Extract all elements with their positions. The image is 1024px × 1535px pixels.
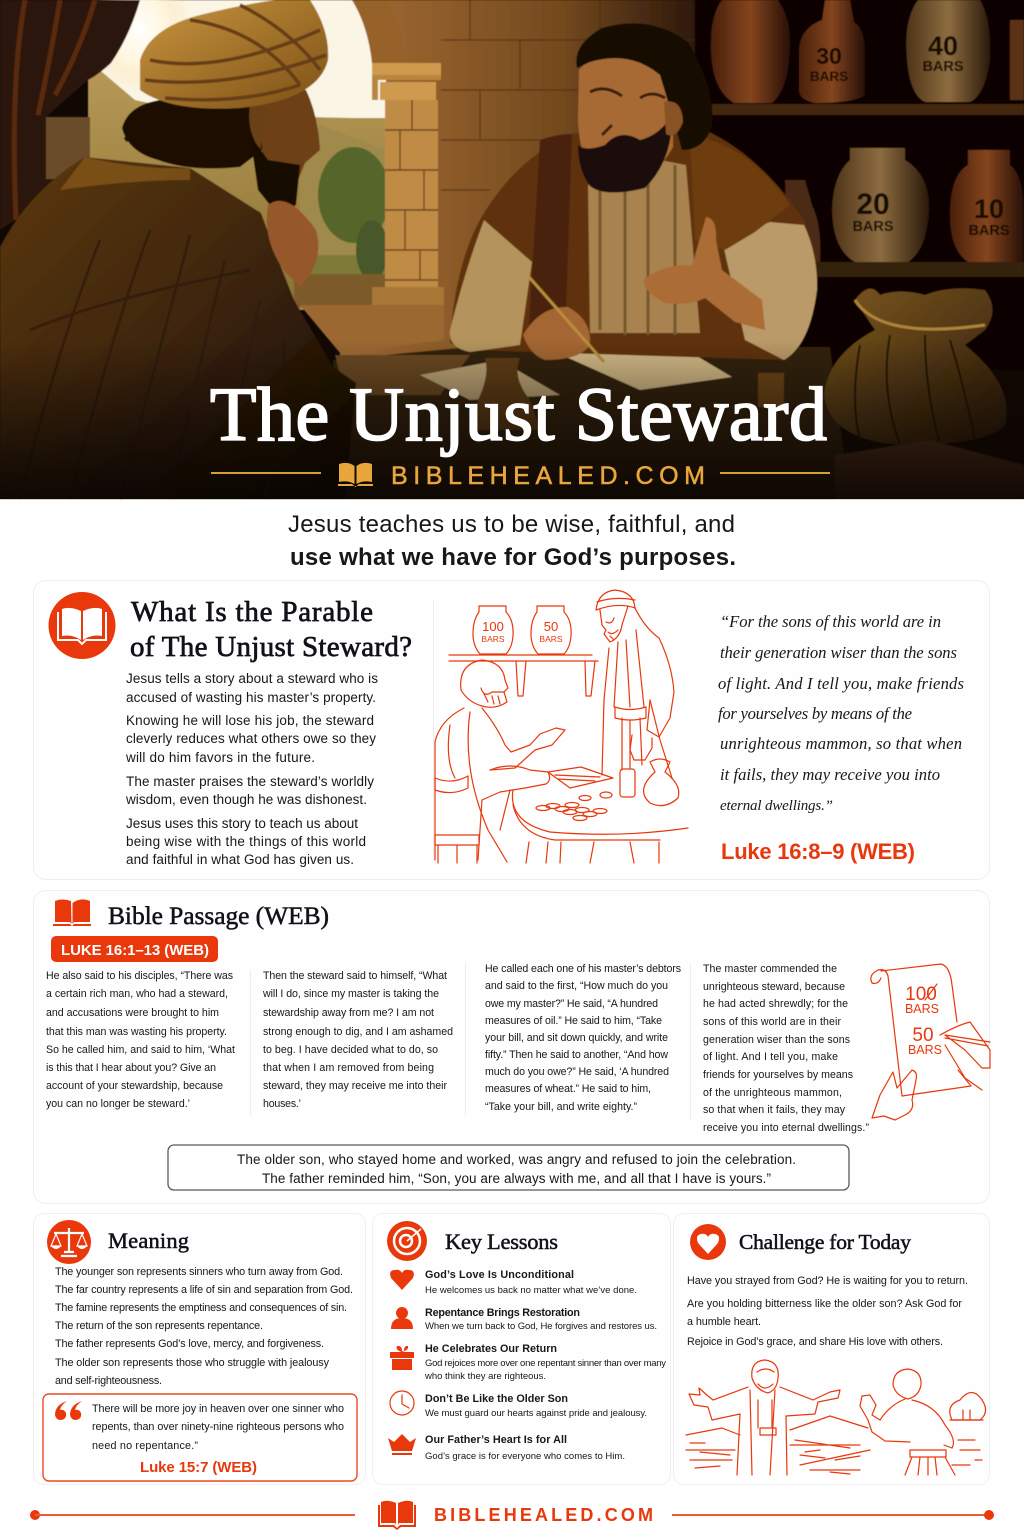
illustration: steward and master <box>435 590 688 863</box>
lesson 5: God’s grace is for everyone who comes to Him. <box>425 1451 625 1462</box>
icon: gift <box>390 1346 414 1370</box>
illustration: bill being rewritten: BARS <box>905 1002 939 1016</box>
meaning lines: and self-righteousness. <box>55 1375 162 1387</box>
passage column 4: generation wiser than the sons <box>703 1034 850 1046</box>
challenge text: Are you holding bitterness like the older son? Ask God for <box>687 1298 962 1310</box>
passage column 3: fifty.” Then he said to another, “And how <box>485 1049 668 1061</box>
lesson 2: When we turn back to God, He forgives and restores us. <box>425 1321 657 1332</box>
icon: person <box>391 1307 413 1329</box>
summary text: cleverly reduces what others owe so they <box>126 731 376 746</box>
passage column 2: strong enough to dig, and I am ashamed <box>263 1026 453 1038</box>
title: The Unjust Steward <box>210 373 827 457</box>
panel: what is the parable <box>34 580 990 880</box>
hero brand line <box>211 462 830 490</box>
scene: jar labels: BARS <box>922 59 964 75</box>
passage column 3: your bill, and sit down quickly, and write <box>485 1032 668 1044</box>
panel: bible passage <box>34 890 990 1204</box>
passage column 1: is this that I hear about you? Give an <box>46 1062 216 1074</box>
summary text: will do him favors in the future. <box>125 750 315 765</box>
scripture quote: unrighteous mammon, so that when <box>720 734 962 753</box>
meaning lines: The far country represents a life of sin and separation from God. <box>55 1284 353 1296</box>
scripture quote: “For the sons of this world are in <box>720 612 941 631</box>
scene: jar labels: BARS <box>810 69 848 84</box>
standing man <box>596 590 674 778</box>
lesson 2: Repentance Brings Restoration <box>425 1307 580 1319</box>
challenge text: Have you strayed from God? He is waiting for you to return. <box>687 1275 968 1287</box>
icon: target <box>387 1221 427 1261</box>
icon: heart in circle <box>690 1224 726 1260</box>
passage column 3 <box>485 963 681 1113</box>
illustration: father and returning son <box>686 1360 986 1475</box>
passage column 3: and said to the first, “How much do you <box>485 980 668 992</box>
summary text: and faithful in what God has given us. <box>126 852 354 867</box>
illustration: bill being rewritten: 50 <box>912 1025 934 1046</box>
passage column 4 <box>703 963 869 1134</box>
scene: stone wall <box>340 0 705 360</box>
scripture quote: it fails, they may receive you into <box>720 765 940 784</box>
scene: curtain <box>0 0 140 230</box>
meaning lines: The father represents God’s love, mercy, and forgiveness. <box>55 1338 324 1350</box>
passage column 1: you can no longer be steward.’ <box>46 1098 190 1110</box>
summary text: Jesus tells a story about a steward who is <box>126 671 378 686</box>
subtitle: use what we have for God’s purposes. <box>290 544 736 571</box>
passage column 3: “Take your bill, and write eighty.” <box>485 1101 637 1113</box>
footer brand: BIBLEHEALED.COM <box>434 1505 653 1525</box>
jars on shelf: BARS <box>539 634 563 644</box>
summary text: being wise with the things of this world <box>126 834 366 849</box>
heading: Bible Passage (WEB) <box>108 901 329 930</box>
passage column 3: measures of wheat.” He said to him, <box>485 1083 651 1095</box>
lesson 1 <box>390 1269 637 1296</box>
summary text: accused of wasting his master’s property. <box>126 690 376 705</box>
passage column 1: account of your stewardship, because <box>46 1080 223 1092</box>
lesson 3: God rejoices more over one repentant sinner than over many <box>425 1358 666 1369</box>
illustration: bill being rewritten: BARS <box>908 1043 942 1057</box>
icon: open book in circle <box>48 592 116 659</box>
passage column 2: steward, they may receive me into their <box>263 1080 447 1092</box>
passage column 4: so that when it fails, they may <box>703 1104 846 1116</box>
lesson 3: He Celebrates Our Return <box>425 1343 557 1355</box>
quote box: repents, than over ninety-nine righteous persons who <box>92 1421 344 1433</box>
scripture quote: their generation wiser than the sons <box>720 643 957 662</box>
subtitle <box>288 511 736 571</box>
hero brand line: BIBLEHEALED.COM <box>391 462 705 490</box>
passage column 4: unrighteous steward, because <box>703 981 845 993</box>
quote box: need no repentance.” <box>92 1440 198 1452</box>
jars on shelf: BARS <box>481 634 505 644</box>
meaning lines: The older son represents those who struggle with jealousy <box>55 1357 330 1369</box>
passage column 1: a certain rich man, who had a steward, <box>46 988 228 1000</box>
passage column 2 <box>262 970 453 1110</box>
passage column 1: So he called him, and said to him, ‘What <box>46 1044 235 1056</box>
callout: older son: The older son, who stayed home and worked, was angry and refused to join the celebration. <box>237 1152 796 1167</box>
subtitle: Jesus teaches us to be wise, faithful, and <box>288 511 735 538</box>
passage column 1: He also said to his disciples, “There was <box>46 970 233 982</box>
icon: gold book <box>338 463 373 487</box>
passage column 2: that when I am removed from being <box>263 1062 434 1074</box>
callout: older son: The father reminded him, “Son, you are always with me, and all that I have is yours.” <box>262 1171 771 1186</box>
scripture quote: eternal dwellings.” <box>720 798 833 814</box>
lesson 4: We must guard our hearts against pride and jealousy. <box>425 1408 647 1419</box>
footer brand <box>30 1501 994 1530</box>
seated man <box>435 660 565 863</box>
landscape and tree <box>686 1392 986 1474</box>
illustration: bill being rewritten <box>871 964 990 1120</box>
jars on shelf: 50 <box>544 619 558 634</box>
scene: jar labels: BARS <box>968 223 1010 239</box>
passage column 3: measures of oil.” He said to him, “Take <box>485 1015 662 1027</box>
meaning lines <box>55 1266 353 1387</box>
lesson 3: who think they are righteous. <box>424 1371 546 1382</box>
scene: jar labels: 20 <box>856 188 890 221</box>
heading: Key Lessons <box>445 1229 558 1254</box>
meaning lines: The younger son represents sinners who turn away from God. <box>55 1266 343 1278</box>
passage column 3: much do you owe?” He said, ‘A hundred <box>485 1066 669 1078</box>
summary text: Knowing he will lose his job, the steward <box>126 713 374 728</box>
lesson 5: Our Father’s Heart Is for All <box>425 1434 567 1446</box>
passage column 2: houses.’ <box>263 1098 301 1110</box>
jars on shelf: 100 <box>482 619 504 634</box>
holding hand <box>872 1070 916 1120</box>
scene: jar labels: 10 <box>974 194 1004 224</box>
panel: meaning <box>34 1214 366 1484</box>
lesson 3 <box>390 1343 666 1382</box>
scene: left man, listener <box>0 0 356 499</box>
passage column 2: Then the steward said to himself, “What <box>263 970 447 982</box>
panel: challenge for today <box>674 1214 990 1484</box>
heading <box>130 596 412 663</box>
icon: heart <box>390 1270 414 1290</box>
icon: red book <box>53 899 91 926</box>
icon: crown <box>388 1434 416 1455</box>
lesson 2 <box>391 1307 657 1332</box>
scene: jar labels <box>810 31 1010 239</box>
heading: Meaning <box>108 1228 189 1253</box>
summary text <box>125 671 378 867</box>
lesson 1: God’s Love Is Unconditional <box>425 1269 574 1281</box>
scripture quote: of light. And I tell you, make friends <box>718 674 964 693</box>
icon: footer book <box>378 1501 416 1530</box>
heading: Challenge for Today <box>739 1230 911 1254</box>
passage column 2: will I do, since my master is taking the <box>262 988 439 1000</box>
jars on shelf <box>449 606 598 696</box>
passage column 1: that this man was wasting his property. <box>46 1026 227 1038</box>
scene: sack and box <box>824 288 1024 499</box>
passage column 1: and accusations were brought to him <box>46 1007 219 1019</box>
passage column 4: friends for yourselves by means <box>703 1069 853 1081</box>
scene: arch pillar <box>300 0 444 353</box>
summary text: Jesus uses this story to teach us about <box>126 816 358 831</box>
scene: table and papers <box>333 340 850 499</box>
summary text: The master praises the steward’s worldly <box>126 774 374 789</box>
passage column 4: he had acted shrewdly; for the <box>703 998 848 1010</box>
icon: clock <box>390 1391 414 1415</box>
challenge text: Rejoice in God’s grace, and share His love with others. <box>687 1336 943 1348</box>
passage column 1 <box>46 970 235 1110</box>
scripture quote: for yourselves by means of the <box>718 704 912 723</box>
lesson 4: Don’t Be Like the Older Son <box>425 1393 568 1405</box>
scripture quote <box>718 612 964 864</box>
quote reference: Luke 16:8–9 (WEB) <box>721 839 915 864</box>
scene: right man, steward <box>450 23 817 360</box>
scene: window with landscape <box>88 0 390 310</box>
scene: dark shelves and jars <box>695 0 1024 370</box>
lesson 4 <box>390 1391 647 1419</box>
scene: right man's hands <box>523 217 765 362</box>
scene: jar labels: 30 <box>816 43 842 69</box>
quote box <box>43 1394 357 1481</box>
passage column 3: owe my master?” He said, “A hundred <box>485 998 658 1010</box>
meaning lines: The return of the son represents repentance. <box>55 1320 263 1332</box>
father figure <box>689 1360 840 1475</box>
heading: of The Unjust Steward? <box>130 631 412 663</box>
heading: What Is the Parable <box>131 596 373 628</box>
passage column 4: sons of this world are in their <box>703 1016 841 1028</box>
summary text: wisdom, even though he was dishonest. <box>125 792 367 807</box>
scene: jar labels: 40 <box>928 31 958 61</box>
writing hand <box>940 1022 990 1090</box>
illustration: bill being rewritten: 100 <box>905 984 937 1005</box>
passage column 2: stewardship away from me? I am not <box>263 1007 434 1019</box>
quote box: There will be more joy in heaven over one sinner who <box>92 1403 344 1415</box>
meaning lines: The famine represents the emptiness and consequences of sin. <box>55 1302 347 1314</box>
scene: jar labels: BARS <box>852 219 894 235</box>
panel: key lessons <box>372 1214 670 1484</box>
quote box: Luke 15:7 (WEB) <box>140 1459 257 1476</box>
icon: quote marks <box>55 1401 82 1420</box>
passage column 4: of light. And I tell you, make <box>703 1051 838 1063</box>
passage column 2: to beg. I have decided what to do, so <box>263 1044 438 1056</box>
reference badge <box>51 936 218 962</box>
passage column 4: receive you into eternal dwellings.” <box>703 1122 869 1134</box>
lesson 1: He welcomes us back no matter what we’ve done. <box>425 1285 637 1296</box>
passage column 4: The master commended the <box>703 963 837 975</box>
lesson 5 <box>388 1434 625 1462</box>
passage column 4: of the unrighteous mammon, <box>703 1087 842 1099</box>
challenge text <box>687 1275 968 1348</box>
table and coins <box>512 759 688 863</box>
hero illustration <box>0 0 1024 499</box>
reference badge: LUKE 16:1–13 (WEB) <box>61 942 209 959</box>
icon: scales <box>47 1220 91 1264</box>
son figure <box>860 1369 955 1475</box>
challenge text: a humble heart. <box>687 1316 761 1328</box>
passage column 3: He called each one of his master’s debtors <box>485 963 681 975</box>
callout: older son <box>168 1145 849 1190</box>
